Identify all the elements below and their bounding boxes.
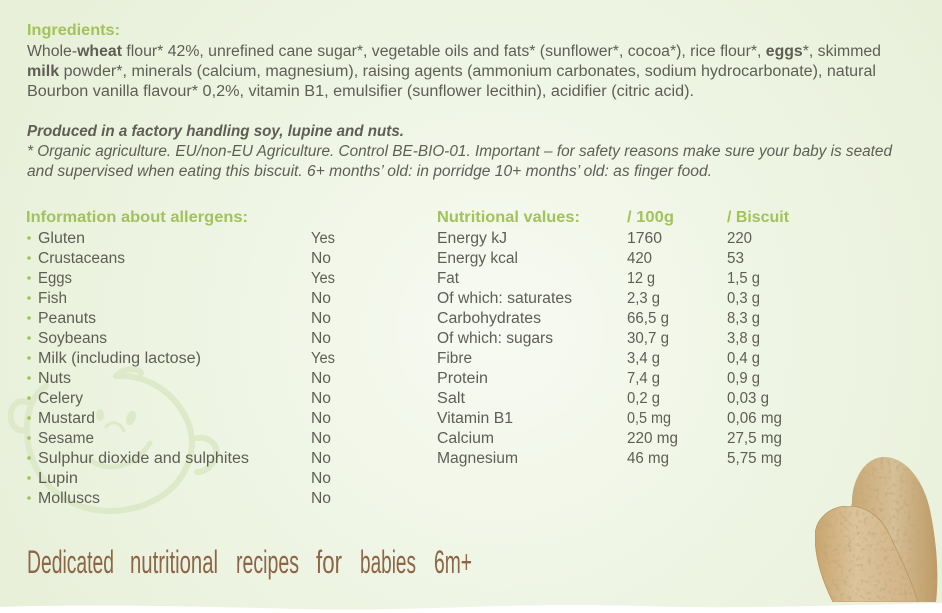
table: nutritional values: 0,9 g — [727, 370, 760, 387]
list: allergens: No — [311, 430, 331, 447]
table: nutritional values: 46 mg — [627, 450, 669, 467]
table: nutritional values: 0,3 g — [727, 290, 760, 307]
tagline: Dedicated — [27, 544, 114, 580]
heading: nutritional values table header — [437, 209, 790, 226]
table: nutritional values — [437, 230, 782, 467]
table: nutritional values: Carbohydrates — [437, 310, 541, 327]
table: nutritional values: 1760 — [627, 230, 662, 247]
table: nutritional values: 8,3 g — [727, 310, 760, 327]
list: allergens: Molluscs — [38, 490, 100, 507]
table: nutritional values: 7,4 g — [627, 370, 660, 387]
list: allergens: Fish — [38, 290, 67, 307]
list: allergens: No — [311, 370, 331, 387]
list: allergens: Gluten — [38, 230, 85, 247]
list: allergens: No — [311, 390, 331, 407]
table: nutritional values: 3,8 g — [727, 330, 760, 347]
list: allergens: Mustard — [38, 410, 95, 427]
list: allergens: Eggs — [38, 270, 72, 287]
table: nutritional values: Energy kcal — [437, 250, 518, 267]
list: allergens: Yes — [311, 350, 335, 367]
table: nutritional values: Fibre — [437, 350, 472, 367]
table: nutritional values: Calcium — [437, 430, 494, 447]
tagline: recipes — [236, 544, 299, 580]
icon: back biscuit — [850, 457, 937, 602]
list: allergens: No — [311, 250, 331, 267]
table: nutritional values: Energy kJ — [437, 230, 507, 247]
text block: ingredients list: Bourbon vanilla flavour* 0,2%, vitamin B1, emulsifier (sunflower lecithin), acidifier (citric acid). — [27, 83, 694, 100]
list: allergens: Sulphur dioxide and sulphites — [38, 450, 249, 467]
table: nutritional values: 0,2 g — [627, 390, 660, 407]
table: nutritional values: 30,7 g — [627, 330, 669, 347]
list: allergens — [27, 230, 335, 507]
table: nutritional values: 0,03 g — [727, 390, 769, 407]
table: nutritional values: Vitamin B1 — [437, 410, 513, 427]
list: allergens: Lupin — [38, 470, 78, 487]
tagline — [27, 544, 472, 580]
text block: factory and organic notice — [27, 123, 893, 180]
list: allergens: Soybeans — [38, 330, 107, 347]
icon: biscuits — [815, 457, 937, 602]
list: allergens: No — [311, 330, 331, 347]
icon: baby face watermark — [11, 369, 217, 511]
table: nutritional values: 0,4 g — [727, 350, 760, 367]
table: nutritional values: 12 g — [627, 270, 655, 287]
table: nutritional values: 2,3 g — [627, 290, 660, 307]
text block: factory and organic notice: * Organic agriculture. EU/non-EU Agriculture. Control BE-BIO-01. Important – for safety reasons make sure your baby is seated — [27, 143, 893, 160]
list: allergens: Peanuts — [38, 310, 96, 327]
table: nutritional values: 53 — [727, 250, 744, 267]
table: nutritional values: 3,4 g — [627, 350, 660, 367]
table: nutritional values: Salt — [437, 390, 466, 407]
table: nutritional values: 220 — [727, 230, 752, 247]
text block: factory and organic notice: and supervised when eating this biscuit. 6+ months’ old: in porridge 10+ months’ old: as finger food. — [27, 163, 712, 180]
list: allergens: Milk (including lactose) — [38, 350, 201, 367]
heading: nutritional values table header: Nutritional values: — [437, 209, 580, 226]
table: nutritional values: 420 — [627, 250, 652, 267]
list: allergens: Nuts — [38, 370, 71, 387]
list: allergens: No — [311, 450, 331, 467]
heading: ingredients: Ingredients: — [27, 22, 120, 39]
table: nutritional values: 1,5 g — [727, 270, 760, 287]
list: allergens: Crustaceans — [38, 250, 125, 267]
table: nutritional values: 27,5 mg — [727, 430, 782, 447]
table: nutritional values: Of which: saturates — [437, 290, 572, 307]
list: allergens: Yes — [311, 230, 335, 247]
tagline: nutritional — [130, 544, 218, 580]
heading: nutritional values table header: / Biscuit — [727, 209, 790, 226]
table: nutritional values: Of which: sugars — [437, 330, 553, 347]
text block: ingredients list: milk powder*, minerals (calcium, magnesium), raising agents (ammonium carbonates, sodium hydrocarbonate), natural — [27, 63, 876, 80]
tagline: for — [316, 544, 342, 580]
tagline: 6m+ — [434, 544, 472, 580]
tagline: babies — [360, 544, 416, 580]
heading: nutritional values table header: / 100g — [627, 209, 674, 226]
table: nutritional values: 5,75 mg — [727, 450, 782, 467]
table: nutritional values: 66,5 g — [627, 310, 669, 327]
heading: allergens: Information about allergens: — [26, 209, 248, 226]
icon: front biscuit — [815, 506, 918, 602]
text block: ingredients list: Whole-wheat flour* 42%, unrefined cane sugar*, vegetable oils and fats* (sunflower*, cocoa*), rice flour*, eggs*, skimmed — [27, 43, 881, 60]
table: nutritional values: Protein — [437, 370, 488, 387]
text block: ingredients list — [27, 43, 881, 100]
list: allergens: No — [311, 470, 331, 487]
list: allergens: Yes — [311, 270, 335, 287]
list: allergens: No — [311, 490, 331, 507]
text block: factory and organic notice: Produced in a factory handling soy, lupine and nuts. — [27, 123, 404, 140]
list: allergens: No — [311, 410, 331, 427]
list: allergens: Sesame — [38, 430, 94, 447]
table: nutritional values: Magnesium — [437, 450, 518, 467]
list: allergens: No — [311, 290, 331, 307]
table: nutritional values: 220 mg — [627, 430, 678, 447]
table: nutritional values: 0,06 mg — [727, 410, 782, 427]
list: allergens: No — [311, 310, 331, 327]
table: nutritional values: 0,5 mg — [627, 410, 671, 427]
list: allergens: Celery — [38, 390, 83, 407]
table: nutritional values: Fat — [437, 270, 460, 287]
